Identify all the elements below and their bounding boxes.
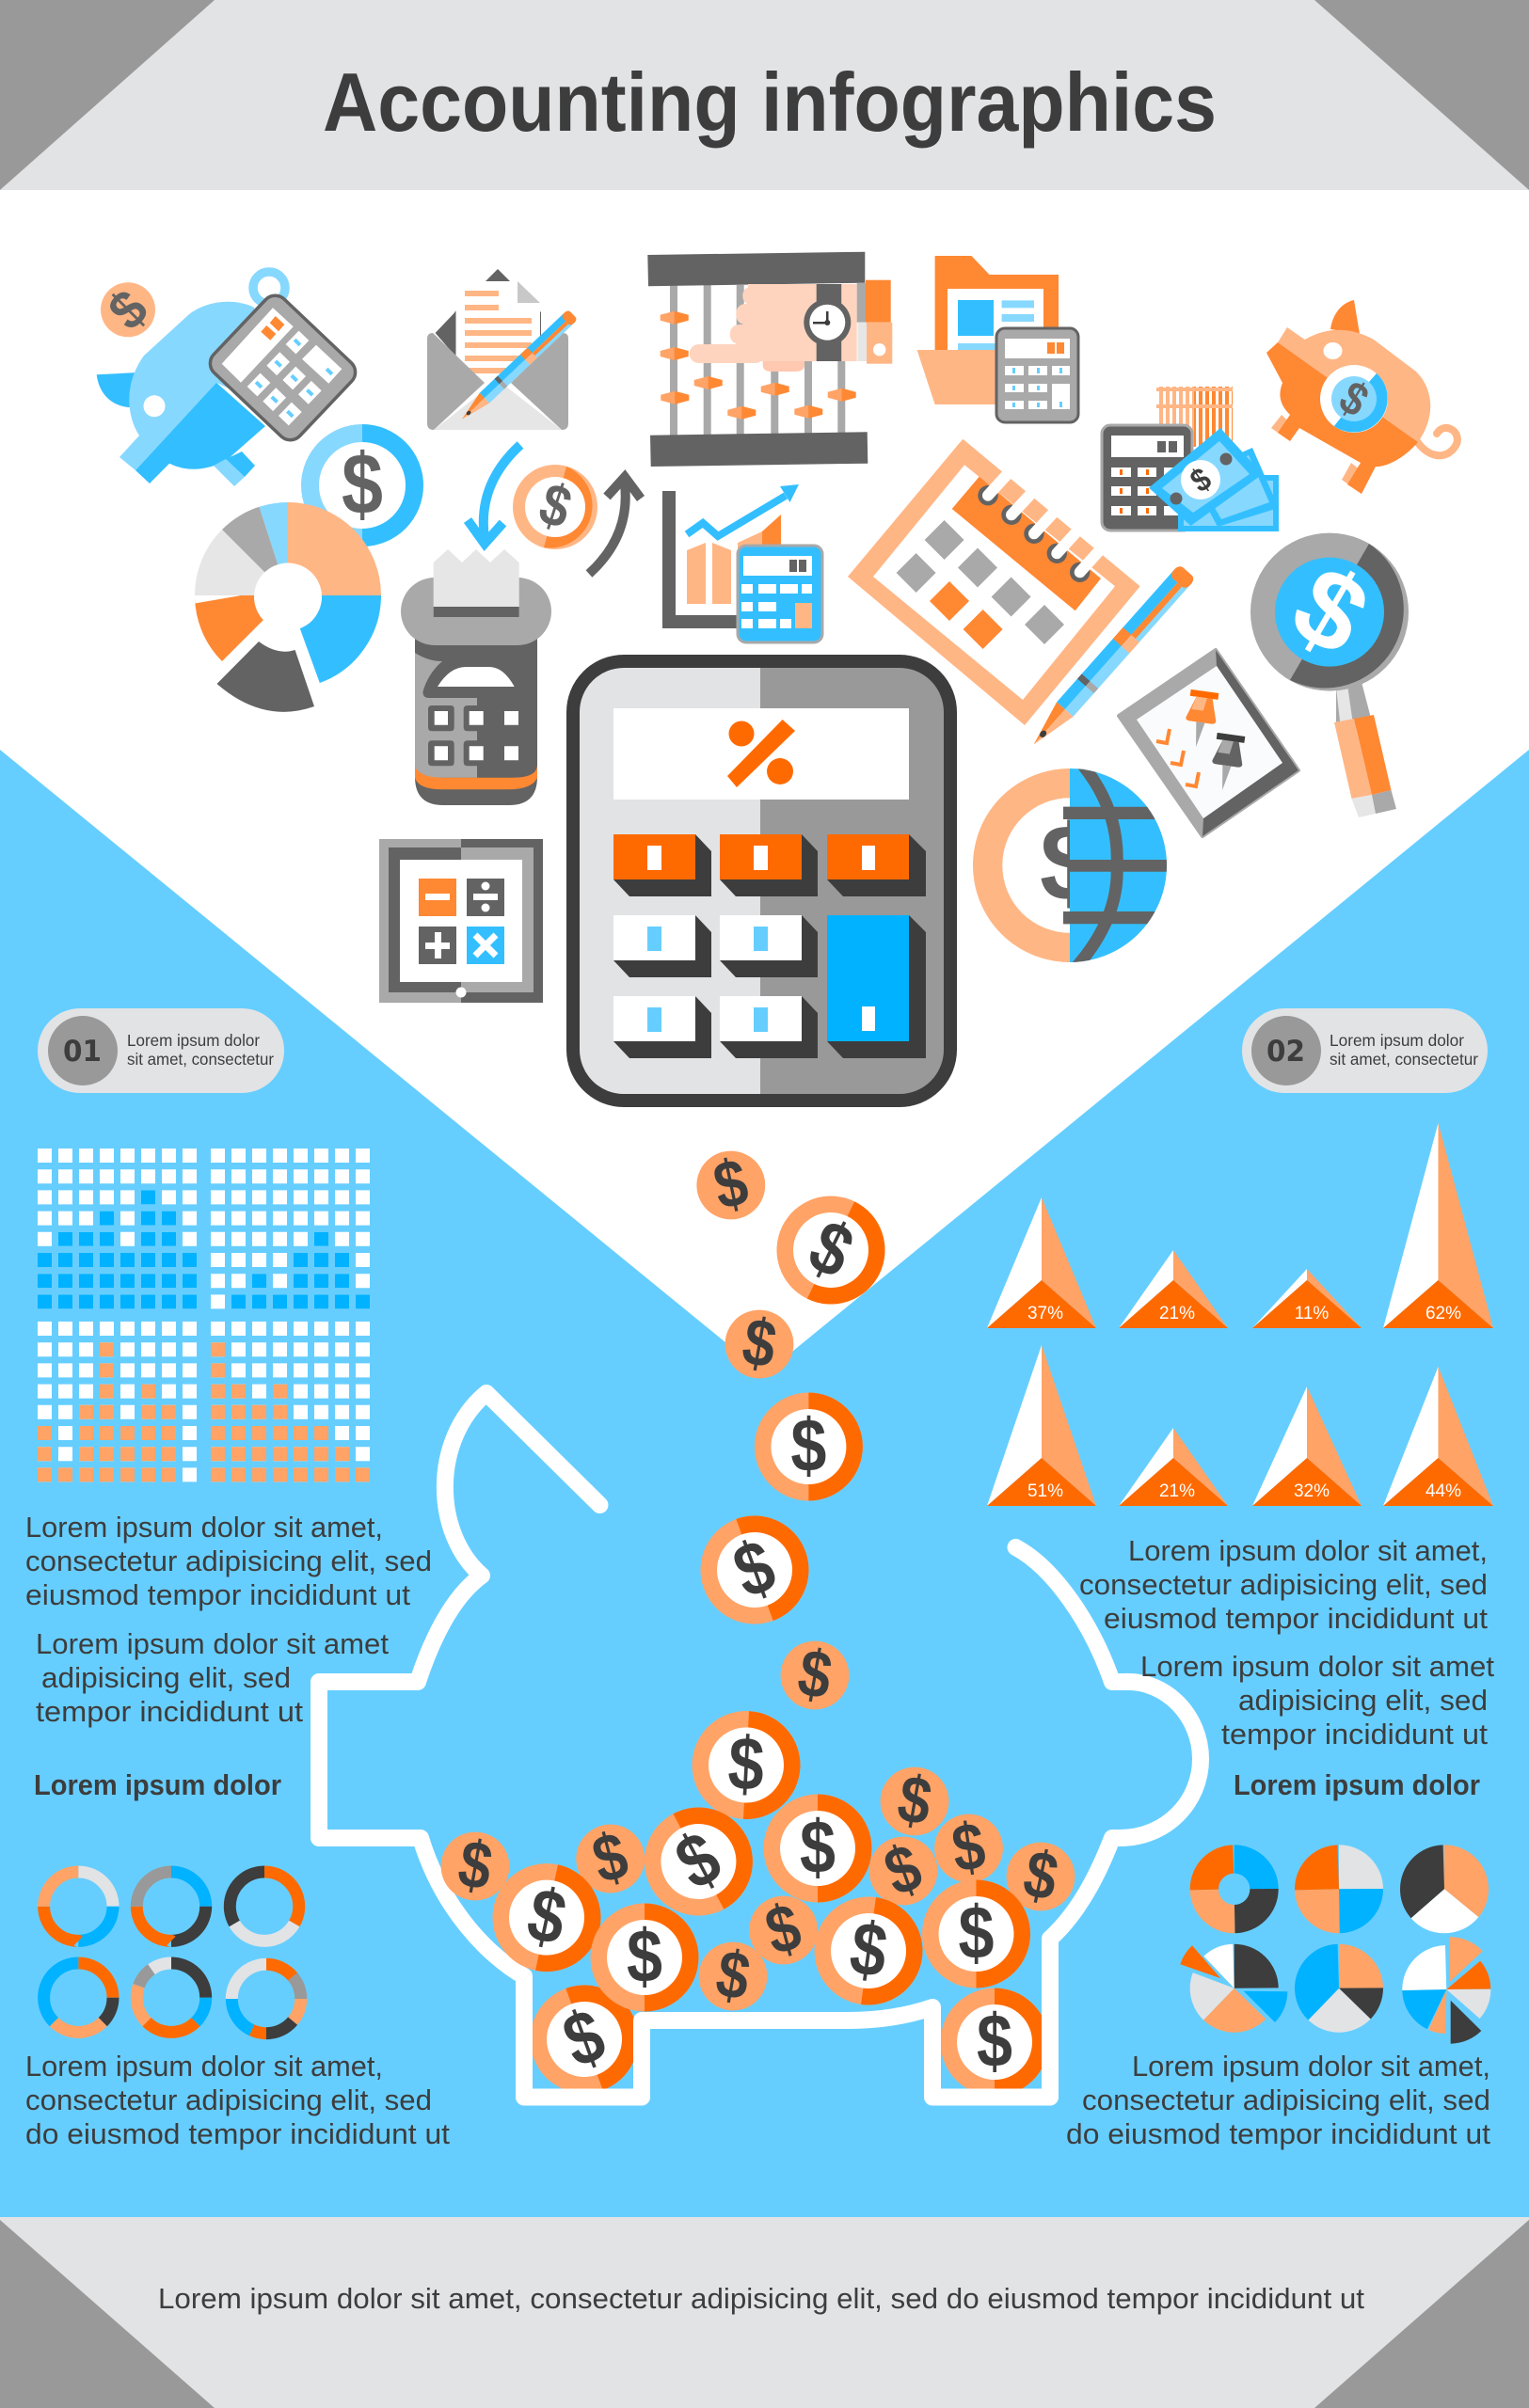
calculator keys [613,834,926,1058]
falling coins: $ [790,1403,826,1487]
ring 3 [230,1872,299,1941]
pyramid 21%: 21% [1159,1304,1195,1323]
pie 1 [1212,1867,1256,1911]
text block: right bottom [1066,2050,1490,2150]
badge 02: sit amet, consectetur [1330,1050,1478,1069]
ring 4 [44,1963,113,2032]
badge 01 [38,1008,284,1093]
orange pin [1182,689,1219,749]
pile of coins: $ [892,1762,937,1840]
coins inside pig feet: $ [977,1999,1012,2083]
pyramid 62%: 62% [1425,1304,1461,1323]
panel: footer band [0,2217,1529,2408]
text block: left bottom [25,2050,450,2150]
coins inside pig feet [515,1970,1048,2109]
icon: magnifying glass [1250,533,1409,817]
icon: orange piggy bank [1266,300,1457,494]
heading: left: Lorem ipsum dolor [34,1768,281,1801]
badge 01: sit amet, consectetur [127,1050,274,1069]
pie 6 exploded [1425,1937,1483,2044]
falling coins: $ [708,1145,755,1225]
chart: pixel dot matrix [38,1155,370,1475]
icon: globe dollar coin: $ [1040,803,1100,924]
icon: coin between arrows: $ [532,470,579,542]
pyramid 37%: 37% [1027,1304,1063,1323]
pile of coins: $ [1017,1836,1064,1916]
icon: orange piggy bank: $ [1330,371,1378,427]
pyramid 11% [1252,1269,1362,1328]
badge 02: 02 [1266,1035,1305,1069]
badge 02: Lorem ipsum dolor [1330,1031,1464,1050]
icon: fountain pen [1026,564,1196,752]
pile of coins: $ [948,1809,990,1887]
text block: left upper: eiusmod tempor incididunt ut [25,1578,410,1611]
ring 5 [136,1963,206,2032]
icon: line and bar chart with blue calculator [662,484,822,642]
text block: left middle: adipisicing elit, sed [41,1661,291,1694]
title: Accounting infographics [323,55,1217,149]
text block: left upper: Lorem ipsum dolor sit amet, [25,1511,383,1544]
badge 01: Lorem ipsum dolor [127,1031,260,1050]
pile of coins: $ [453,1827,498,1905]
text block: right upper: consectetur adipisicing elit, sed [1079,1568,1488,1601]
pyramid 37% [987,1197,1096,1328]
coins inside pig feet: $ [552,1992,615,2083]
icon: tilted calculator [205,290,360,446]
text block: right bottom: consectetur adipisicing elit, sed [1082,2083,1490,2116]
pyramid 51%: 51% [1027,1481,1063,1501]
icon: globe dollar coin [973,762,1167,967]
text block: right upper: Lorem ipsum dolor sit amet, [1128,1534,1488,1567]
icon: calculator with coin stacks and banknotes [1102,387,1279,531]
falling coins: $ [723,1523,786,1614]
ring 2 [136,1872,206,1941]
badge 01: 01 [63,1035,102,1069]
text block: left bottom: Lorem ipsum dolor sit amet, [25,2050,383,2083]
pyramid 44% [1383,1367,1493,1506]
pile of coins: $ [662,1814,733,1906]
pyramid 44%: 44% [1425,1481,1461,1501]
pile of coins: $ [958,1891,994,1974]
pyramid 32%: 32% [1294,1481,1330,1501]
pile of coins [435,1758,1082,2019]
falling coins: $ [737,1305,782,1383]
chart: percentage pyramids [987,1123,1493,1506]
falling coins [685,1141,903,1822]
falling coins: $ [797,1203,866,1294]
icon: folder with calculator [917,256,1078,422]
pile of coins: $ [800,1805,836,1889]
pile of coins: $ [520,1872,573,1961]
ring 6 [231,1964,301,2034]
icon: small dollar coin top left: $ [97,278,160,341]
pile of coins: $ [710,1937,756,2015]
icon: abacus with hand [647,252,892,467]
calculator display [613,708,909,800]
footer text: Lorem ipsum dolor sit amet, consectetur adipisicing elit, sed do eiusmod tempor incididunt ut [158,2282,1364,2315]
icon: large calculator [573,661,950,1101]
heading: right: Lorem ipsum dolor [1234,1768,1480,1801]
text block: left middle [36,1627,389,1728]
text block: right middle [1140,1650,1494,1751]
icon: blue ring coin: $ [342,436,383,532]
text block: right bottom: do eiusmod tempor incididunt ut [1066,2117,1490,2150]
pyramid 32% [1252,1386,1362,1506]
pyramid 21% lower [1119,1428,1228,1506]
pyramid 21% [1119,1250,1228,1328]
chart: doughnut rings [44,1872,301,2034]
icon: blue ring coin [301,424,423,547]
pyramid 21% lower: 21% [1159,1481,1195,1501]
arrow: dark curved up [589,477,641,574]
icon: operations calculator [379,839,543,1003]
pile of coins: $ [845,1906,892,1993]
text block: right upper [1079,1534,1488,1635]
badge 02 [1242,1008,1488,1093]
icon: notebook calendar [848,439,1140,725]
text block: left middle: tempor incididunt ut [36,1695,303,1728]
pile of coins: $ [875,1830,931,1910]
pile of coins: $ [758,1890,808,1970]
icon: calculator with coin stacks and banknotes: $ [1184,461,1218,499]
piggy bank outline [319,1393,1201,2098]
pie 3 [1423,1867,1466,1911]
pyramid 62% [1383,1123,1493,1328]
text block: right upper: eiusmod tempor incididunt ut [1104,1602,1488,1635]
falling coins: $ [792,1636,837,1714]
pyramid 11%: 11% [1295,1304,1329,1323]
text block: right middle: tempor incididunt ut [1221,1718,1488,1751]
icon: envelope with letter and pen [427,269,578,430]
dark pin [1208,733,1246,792]
pie 5 [1317,1966,1361,2010]
pile of coins: $ [585,1818,635,1898]
arrow: blue curved down [468,445,520,544]
icon: coin between arrows [513,465,597,549]
text block: left bottom: consectetur adipisicing elit, sed [25,2083,432,2116]
text block: left upper: consectetur adipisicing elit, sed [25,1545,432,1577]
text block: left middle: Lorem ipsum dolor sit amet [36,1627,389,1660]
panel: blue chevron background [0,750,1529,2220]
text block: right bottom: Lorem ipsum dolor sit amet, [1132,2050,1490,2083]
pyramid 51% [987,1345,1096,1506]
icon: blue piggy bank with calculator [97,272,360,486]
text block: left upper [25,1511,432,1611]
icon: card terminal [401,549,551,805]
falling coins: $ [726,1721,766,1806]
panel: header band [0,0,1529,190]
chart: exploded doughnut pie [216,549,335,712]
chart: pie charts [1180,1867,1483,2044]
text block: right middle: adipisicing elit, sed [1238,1684,1488,1717]
pile of coins: $ [627,1914,662,1998]
pie 2 [1317,1867,1361,1911]
icon: magnifying glass: $ [1272,542,1388,680]
ring 1 [44,1872,113,1941]
text block: right middle: Lorem ipsum dolor sit amet [1140,1650,1494,1683]
icon: pinned board [1119,650,1298,836]
text block: left bottom: do eiusmod tempor incididunt ut [25,2117,450,2150]
pie 4 exploded [1180,1945,1287,2022]
calculator body [573,661,950,1101]
